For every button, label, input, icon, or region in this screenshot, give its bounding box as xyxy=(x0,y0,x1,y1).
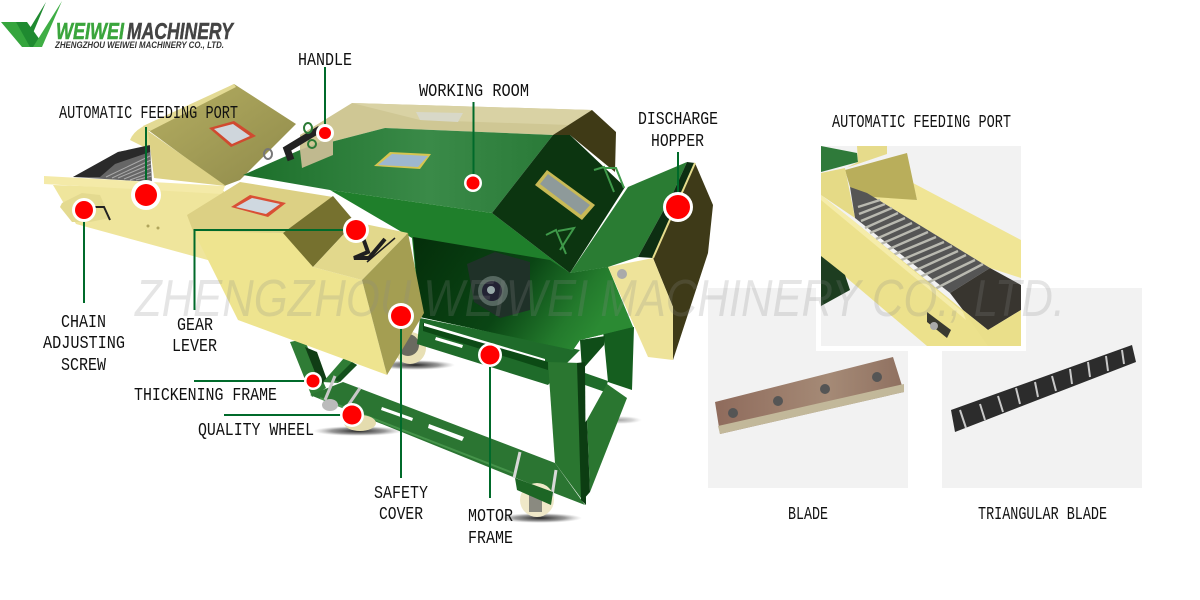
label: blade: BLADE xyxy=(788,505,828,525)
rear wheel xyxy=(394,332,426,364)
lower bright band xyxy=(330,190,633,350)
label: thickening frame: THICKENING FRAME xyxy=(134,386,277,406)
warning sticker xyxy=(231,195,286,217)
body sticker front xyxy=(374,152,431,169)
panel: blade photo xyxy=(708,288,908,488)
lower shaded side xyxy=(413,237,633,350)
triangular blade xyxy=(951,345,1136,432)
label: chain adjusting screw: SCREW xyxy=(61,356,106,376)
label: chain adjusting screw xyxy=(43,313,125,376)
callout: discharge hopper xyxy=(663,152,693,222)
logo wordmark: WEIWEI xyxy=(56,18,124,44)
left struts xyxy=(290,339,357,397)
logo xyxy=(1,1,235,51)
warning sticker xyxy=(209,121,256,147)
callout: gear lever xyxy=(194,217,369,310)
callout: handle xyxy=(316,67,334,142)
rear hood xyxy=(143,84,296,186)
label: handle: HANDLE xyxy=(298,51,352,71)
conveyor illustration xyxy=(821,146,1021,346)
front wheel xyxy=(514,452,556,517)
wheel shadows xyxy=(313,360,642,523)
label: chain adjusting screw: ADJUSTING xyxy=(43,334,125,354)
label: automatic feeding port photo: AUTOMATIC FEEDING PORT xyxy=(832,113,1011,133)
machine illustration xyxy=(44,84,713,523)
end face olive xyxy=(553,110,616,172)
logo wordmark 2: MACHINERY xyxy=(127,18,235,44)
gear cover xyxy=(187,182,424,375)
front leg xyxy=(548,362,586,505)
label: motor frame xyxy=(468,507,513,549)
dark green end face xyxy=(492,135,625,273)
feed conveyor rollers xyxy=(73,124,152,182)
latches xyxy=(546,167,624,254)
label: gear lever: LEVER xyxy=(172,337,217,357)
callout: working room xyxy=(464,102,482,192)
callout: thickening frame xyxy=(194,372,322,390)
handle xyxy=(264,123,333,168)
bearing xyxy=(467,252,530,318)
label: discharge hopper xyxy=(638,110,718,152)
label: motor frame: MOTOR xyxy=(468,507,513,527)
label: safety cover: SAFETY xyxy=(374,484,428,504)
top beige panel xyxy=(300,103,592,150)
left wheel xyxy=(322,376,376,431)
discharge hopper xyxy=(570,162,713,360)
logo mark xyxy=(1,1,62,47)
label: automatic feeding port: AUTOMATIC FEEDING PORT xyxy=(59,104,238,124)
bottom beam xyxy=(310,382,585,505)
label: motor frame: FRAME xyxy=(468,529,513,549)
label: working room: WORKING ROOM xyxy=(419,82,529,102)
label: chain adjusting screw: CHAIN xyxy=(61,313,106,333)
working room body xyxy=(243,103,633,350)
logo tagline: ZHENGZHOU WEIWEI MACHINERY CO., LTD. xyxy=(54,40,224,51)
body sticker end xyxy=(535,170,595,220)
rear right leg xyxy=(580,327,634,500)
callout: automatic feeding port xyxy=(131,127,161,210)
label: gear lever: GEAR xyxy=(177,316,213,336)
label: safety cover xyxy=(374,484,428,525)
motor frame xyxy=(417,318,580,385)
panel: feeding port photo xyxy=(816,141,1026,351)
label: safety cover: COVER xyxy=(379,505,423,525)
label: discharge hopper: HOPPER xyxy=(651,132,704,152)
panel: triangular blade photo xyxy=(942,288,1142,488)
feed trough side xyxy=(44,176,225,262)
callout: chain adjusting screw xyxy=(72,198,96,303)
label: quality wheel: QUALITY WHEEL xyxy=(198,421,314,441)
top green face xyxy=(243,128,553,213)
callout: quality wheel xyxy=(224,403,364,427)
label: gear lever xyxy=(172,316,217,357)
callout: motor frame xyxy=(478,343,502,498)
gear lever xyxy=(354,238,385,258)
label: discharge hopper: DISCHARGE xyxy=(638,110,718,130)
blade xyxy=(715,357,904,434)
callout: safety cover xyxy=(388,303,414,478)
label: triangular blade: TRIANGULAR BLADE xyxy=(978,505,1107,525)
